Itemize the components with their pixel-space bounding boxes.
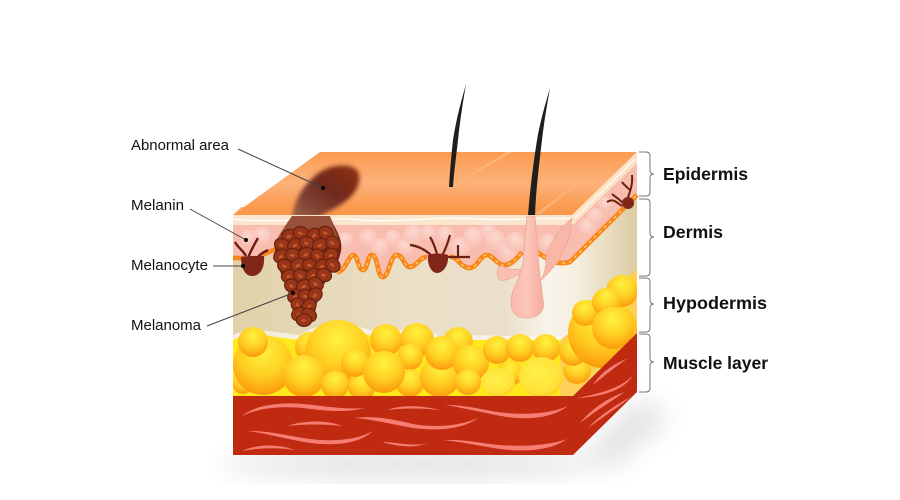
melanocyte left	[235, 238, 268, 276]
bracket: Dermis	[639, 199, 723, 276]
melanoma	[271, 216, 343, 326]
bracket: Muscle layer	[639, 334, 768, 392]
label: Abnormal area	[131, 137, 325, 190]
label: Melanin	[131, 197, 248, 242]
dermis cells	[240, 197, 612, 262]
melanocyte right	[607, 175, 634, 209]
label: Melanocyte: Melanocyte	[131, 257, 208, 274]
label: Melanin: Melanin	[131, 197, 184, 214]
abnormal area mole	[292, 165, 360, 218]
panel: epidermis top surface	[233, 152, 637, 218]
epidermis front band	[233, 215, 572, 225]
bracket: Epidermis: Epidermis	[663, 164, 748, 184]
bracket: Muscle layer: Muscle layer	[663, 353, 768, 373]
drop shadow	[220, 400, 670, 474]
hair follicle and erector muscle	[497, 216, 572, 318]
bracket: Epidermis	[639, 152, 748, 196]
dermis pink tissue	[233, 163, 637, 277]
bracket: Hypodermis	[639, 278, 767, 332]
melanocyte centre	[410, 235, 470, 273]
bracket: Hypodermis: Hypodermis	[663, 293, 767, 313]
label: Abnormal area: Abnormal area	[131, 137, 230, 154]
panel: hypodermis fat	[232, 270, 638, 400]
label: Melanocyte	[131, 257, 245, 274]
hairs	[449, 84, 550, 215]
panel: dermis and hypodermis front	[233, 152, 637, 400]
bracket: Dermis: Dermis	[663, 222, 723, 242]
label: Melanoma	[131, 291, 295, 334]
panel: muscle layer	[233, 333, 637, 455]
basement membrane	[233, 195, 637, 277]
label: Melanoma: Melanoma	[131, 317, 202, 334]
